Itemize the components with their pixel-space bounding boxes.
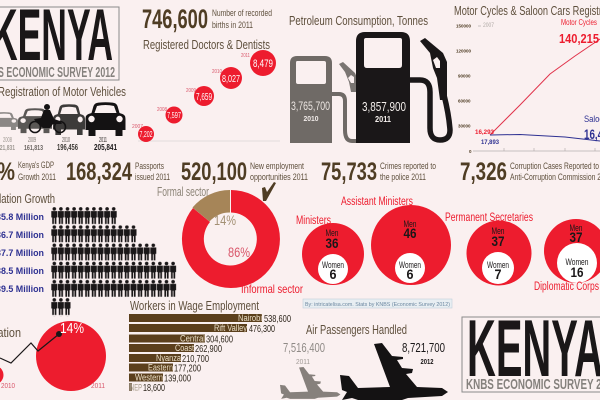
credit line <box>303 299 452 308</box>
label: 86 percent: 86% <box>228 244 250 260</box>
region labels: Nairobi <box>238 313 262 323</box>
row labels <box>0 212 44 295</box>
panel: population growth <box>0 191 176 316</box>
panel: ministers: Women <box>322 260 344 270</box>
panel: ministers: 36 <box>326 235 339 251</box>
bubble: 2009: 7,659 <box>196 92 212 103</box>
icon: car 2009 <box>18 108 52 133</box>
bubble: 2011: 8,479 <box>253 58 273 70</box>
panel: permanent secretaries: 37 <box>492 233 505 249</box>
values: 538,600 <box>264 313 291 325</box>
axis labels: 60000 <box>458 98 471 104</box>
label: 14 percent: 14% <box>60 320 84 337</box>
icon: car 2010 <box>53 104 85 135</box>
icon: fuel pump 2011: 3,857,900 <box>362 99 406 114</box>
panel: permanent secretaries: Permanent Secretaries <box>445 212 533 224</box>
panel: motorcycles and saloon cars line chart <box>454 3 600 154</box>
icon: fuel pump 2011: 2011 <box>375 115 392 124</box>
panel: diplomatic corps <box>534 219 600 293</box>
label: 2012 passengers <box>402 340 445 366</box>
line: inflation trend <box>0 331 62 363</box>
heading: petroleum: Petroleum Consumption, Tonnes <box>289 13 428 28</box>
icon: plane 2012 <box>340 343 448 400</box>
bubble: 2007 <box>132 124 154 142</box>
text: year 2009: 161,813 <box>24 143 43 152</box>
footer: Kenya bottom-right <box>462 304 600 394</box>
label: 2012 passengers: 8,721,700 <box>402 340 445 355</box>
panel: permanent secretaries: Men <box>492 226 504 236</box>
region labels <box>130 313 262 392</box>
panel: workers in wage employment <box>129 298 291 394</box>
axis labels: 0 <box>469 149 472 154</box>
panel: diplomatic corps: 37 <box>570 229 583 245</box>
label: 14 percent: 14% <box>214 212 236 228</box>
text: year 2011: 205,841 <box>94 143 117 152</box>
icon: motorcycle <box>30 104 66 132</box>
stat: crimes: 75,733 <box>321 158 377 186</box>
stat: recorded births: 746,600 <box>142 4 208 34</box>
stat: GDP growth: Growth 2011 <box>18 172 56 182</box>
panel: ministers: Men <box>326 228 338 238</box>
values: 262,900 <box>195 343 222 355</box>
stat: passports: issued 2011 <box>135 172 170 182</box>
stat: crimes <box>321 158 436 186</box>
icon: plane 2011 <box>280 367 340 399</box>
bubble: 2011: 2011 <box>241 53 250 59</box>
region labels: Eastern <box>148 362 173 372</box>
axis labels: 120000 <box>456 48 472 54</box>
stat: new employment: 520,100 <box>181 158 247 186</box>
panel: diplomatic corps: Women <box>566 257 588 267</box>
axis labels <box>456 24 472 154</box>
values: 476,300 <box>249 323 275 335</box>
donut: formal sector <box>192 190 230 222</box>
panel: air passengers handled <box>280 322 448 400</box>
label: saloon cars series: 17,893 <box>481 139 499 146</box>
label: 2012 passengers: 2012 <box>420 359 434 366</box>
panel: assistant ministers: 6 <box>406 266 414 282</box>
pictogram: people rows <box>51 207 176 316</box>
label: formal sector: Formal sector <box>157 184 209 199</box>
panel: assistant ministers: Men <box>404 219 416 229</box>
panel: permanent secretaries: 7 <box>494 266 502 282</box>
panel: assistant ministers: Women <box>399 260 421 270</box>
text: year 2008: 2008 <box>3 137 12 144</box>
text: year 2010: 2010 <box>62 137 70 144</box>
bubble: 2008: 7,597 <box>167 111 181 120</box>
bubble: 2010: 2010 <box>212 69 222 75</box>
bubble: 2009 <box>186 86 214 106</box>
label: saloon cars series <box>481 114 600 146</box>
panel: permanent secretaries: Women <box>487 260 509 270</box>
text: year 2010 <box>57 137 78 152</box>
stat: new employment: opportunities 2011 <box>250 172 308 182</box>
region labels: Nyanza <box>156 353 181 363</box>
axis labels: 30000 <box>458 124 471 128</box>
header: Kenya top-left <box>0 0 119 81</box>
stat: new employment: New employment <box>250 161 304 171</box>
text: year 2011: 2011 <box>99 137 107 144</box>
donut: informal sector <box>182 190 280 288</box>
values: 139,000 <box>164 372 191 384</box>
panel: ministers: Ministers <box>296 215 331 227</box>
stat: recorded births: births in 2011 <box>212 20 253 31</box>
bubble: 2007: 7,202 <box>140 130 153 139</box>
bubble: 2007: 2007 <box>132 124 143 130</box>
heading: workers: Workers in Wage Employment <box>130 298 259 313</box>
line: motor cycles <box>490 39 600 135</box>
region labels: Central <box>180 334 205 344</box>
stat: passports: Passports <box>135 161 164 171</box>
axis labels: 150000 <box>456 24 472 28</box>
panel: petroleum consumption <box>289 13 450 143</box>
heading: motor vehicles: Registration of Motor Vehicles <box>0 84 126 99</box>
label: 2011 passengers <box>283 340 325 366</box>
values: 210,700 <box>182 353 209 365</box>
text: year 2010: 196,456 <box>57 143 78 152</box>
text: year 2008 <box>0 137 15 152</box>
bubble: 2010 <box>0 366 4 384</box>
text: year 2009: 2009 <box>28 137 36 144</box>
panel: ministers <box>296 215 364 285</box>
panel: inflation <box>0 320 106 391</box>
panel: permanent secretaries <box>445 212 533 286</box>
heading: air passengers: Air Passengers Handled <box>306 322 407 337</box>
label: 2011 passengers: 2011 <box>296 359 310 366</box>
panel: assistant ministers <box>341 196 451 285</box>
region labels: NEP <box>130 382 142 392</box>
label: 2011: 2011 <box>91 383 105 390</box>
icon: check mark <box>262 182 276 201</box>
text: year 2011 <box>94 137 117 152</box>
icon: car 2011 <box>86 102 126 136</box>
stat: corruption cases: 7,326 <box>460 158 507 186</box>
icon: fuel pump 2010: 2010 <box>304 114 318 123</box>
stat: recorded births: Number of recorded <box>212 8 272 19</box>
bubble: 2011 <box>36 321 106 391</box>
stat: passports: 168,324 <box>66 158 132 186</box>
stat: corruption cases <box>460 158 600 186</box>
icon: fuel pump 2011 <box>356 32 450 143</box>
panel: diplomatic corps: 16 <box>570 264 584 280</box>
panel: formal vs informal donut chart <box>157 182 303 296</box>
axis labels: 90000 <box>458 74 471 78</box>
values <box>143 313 291 394</box>
panel: registered doctors and dentists <box>132 37 280 142</box>
line: saloon cars <box>490 134 600 141</box>
region labels: Coast <box>175 343 194 353</box>
panel: registration of motor vehicles <box>0 84 126 152</box>
bubble: 2011 <box>241 50 276 76</box>
bubble: 2008: 2008 <box>157 107 167 113</box>
heading: doctors and dentists: Registered Doctors & Dentists <box>143 37 270 52</box>
icon: car 2008 <box>0 112 18 130</box>
bubble: 2010: 8,027 <box>222 73 240 85</box>
region labels: Rift Valley <box>214 323 247 333</box>
panel: motorcycles and saloon cars line chart: 2007 <box>483 23 495 29</box>
stat: crimes: Crimes reported to <box>380 161 436 171</box>
label: 2011 passengers: 7,516,400 <box>283 340 325 355</box>
values: 304,600 <box>206 334 233 346</box>
bubble: 2009: 2009 <box>186 88 196 94</box>
values: 18,600 <box>143 382 165 394</box>
icon: fuel pump 2010: 3,765,700 <box>291 99 330 113</box>
panel: assistant ministers: 46 <box>404 225 417 241</box>
region labels: Western <box>135 372 163 382</box>
panel: diplomatic corps: Men <box>570 223 582 233</box>
stat: crimes: the police 2011 <box>380 172 426 182</box>
credit line: By: intricatelisa.com. Stats by KNBS (Economic Survey 2012) <box>305 302 450 308</box>
icon: fuel pump 2010 <box>290 56 358 143</box>
values: 177,200 <box>174 362 201 374</box>
panel: ministers: 6 <box>330 266 337 282</box>
label: 2010: 2010 <box>1 383 15 390</box>
stat: GDP growth: Kenya's GDP <box>18 160 54 170</box>
stat: GDP growth <box>0 158 56 186</box>
text: year 2009 <box>24 137 43 152</box>
label: motor cycles series <box>475 18 599 136</box>
bubble: 2008 <box>157 106 182 124</box>
bars <box>129 314 262 391</box>
label: informal sector: Informal sector <box>241 282 303 296</box>
bubble: 2010 <box>212 67 242 89</box>
panel: assistant ministers: Assistant Ministers <box>341 196 413 208</box>
label: motor cycles series: 16,293 <box>475 129 494 136</box>
